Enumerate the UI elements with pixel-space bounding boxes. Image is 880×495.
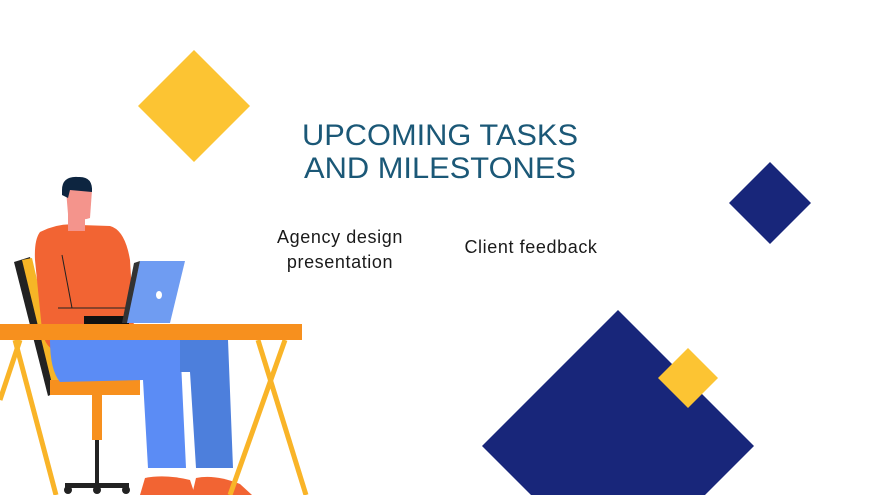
- chair seat: [50, 380, 140, 395]
- title: [302, 119, 578, 185]
- neck & face: [68, 205, 85, 231]
- torso: [35, 224, 135, 352]
- task label: client feedback: Client feedback: [464, 237, 598, 257]
- desk top: [0, 324, 302, 340]
- shoes: [140, 476, 195, 495]
- decorative diamond: navy small: [729, 162, 811, 244]
- task label: agency design presentation: [277, 227, 403, 272]
- desk legs: [0, 340, 306, 495]
- illustration: man at desk with laptop: [0, 177, 306, 495]
- laptop: [84, 316, 129, 324]
- chair post and base: [92, 392, 102, 440]
- task label: agency design presentation: presentation: [287, 252, 393, 272]
- decorative diamond: yellow top: [138, 50, 250, 162]
- title: UPCOMING TASKS: [302, 119, 578, 152]
- chair back: [14, 257, 62, 396]
- task label: agency design presentation: Agency design: [277, 227, 403, 247]
- decorative diamond: yellow small: [658, 348, 718, 408]
- title: AND MILESTONES: [304, 152, 576, 185]
- legs: [50, 340, 186, 468]
- decorative diamond: navy large: [482, 310, 754, 495]
- hair: [62, 177, 92, 198]
